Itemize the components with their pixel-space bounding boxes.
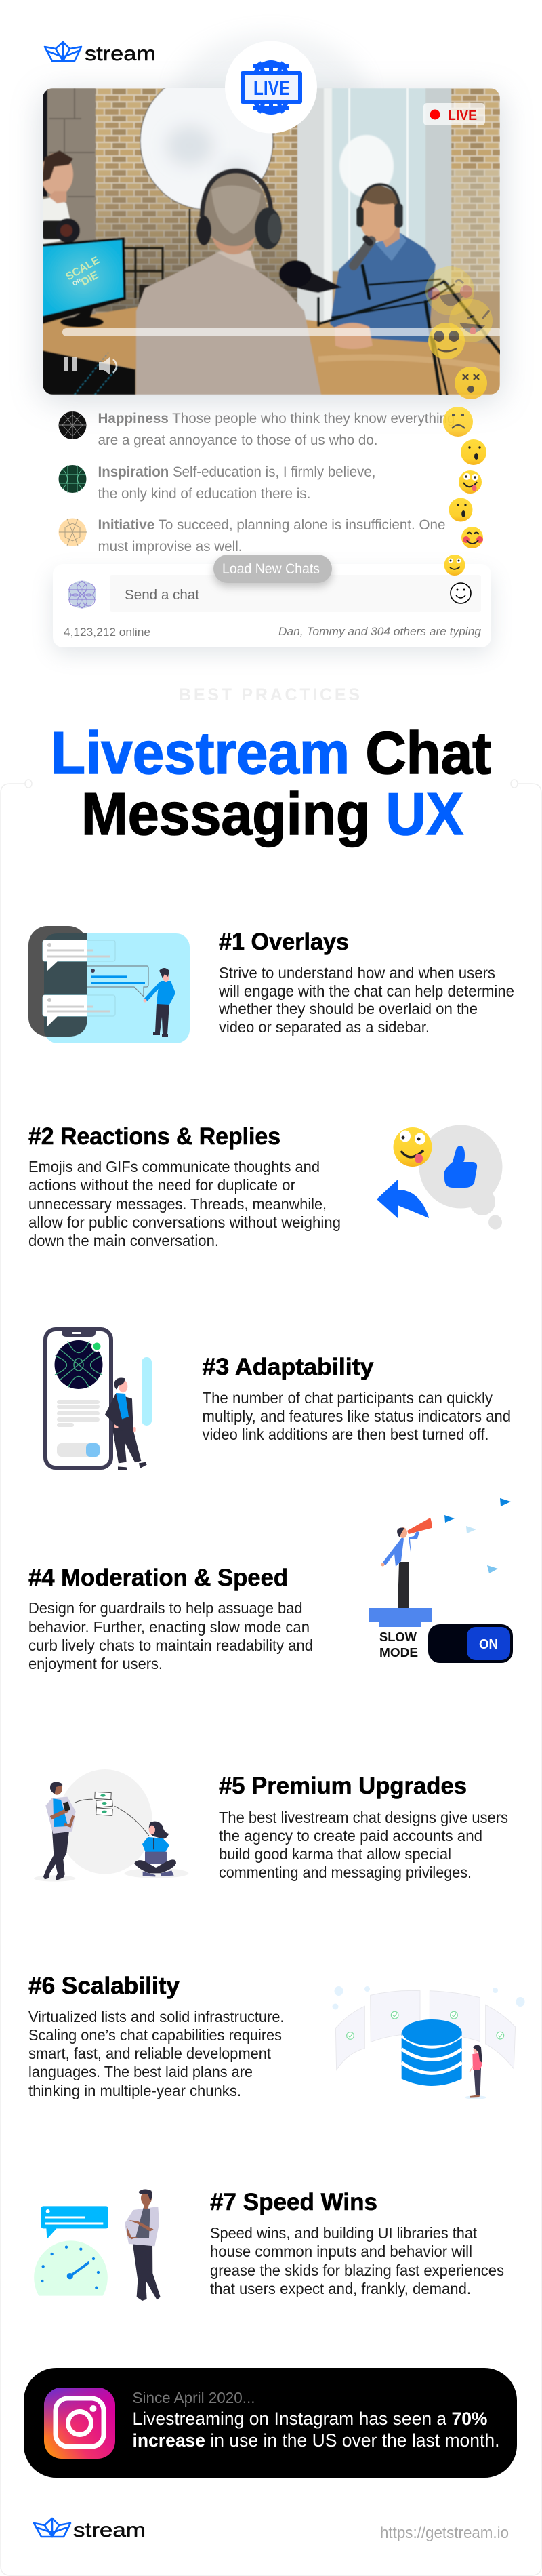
section 4: moderation and speed: curb lively chats to maintain readability and xyxy=(28,1636,313,1654)
pause icon xyxy=(64,357,77,371)
progress bar xyxy=(62,328,503,336)
emoji: knocked out xyxy=(455,367,487,399)
load new chats button xyxy=(213,555,332,587)
background glow behind video xyxy=(43,34,500,400)
section 5: premium upgrades: The best livestream chat designs give users xyxy=(219,1809,508,1826)
section 7: speed wins: grease the skids for blazing fast experiences xyxy=(210,2261,504,2279)
chat message: Initiative xyxy=(58,517,446,555)
logo: stream: stream xyxy=(85,43,156,65)
illustration: payments xyxy=(34,1769,188,1882)
boom arms xyxy=(318,239,500,395)
section 6: scalability: Scaling one’s chat capabilities requires xyxy=(28,2026,282,2044)
live badge: LIVE xyxy=(448,108,477,123)
section 2: reactions and replies: Emojis and GIFs communicate thoughts and xyxy=(28,1158,320,1175)
section 3: adaptability xyxy=(45,1329,511,1470)
section 2: reactions and replies xyxy=(28,1123,503,1249)
logo: stream xyxy=(45,42,156,65)
shelf xyxy=(125,248,164,298)
profile art xyxy=(54,1340,103,1389)
softbox xyxy=(140,73,273,209)
woman with laptop xyxy=(149,1822,169,1838)
icon: instagram xyxy=(44,2388,115,2459)
section 3: adaptability: #3 Adaptability xyxy=(202,1354,374,1380)
illustration: database xyxy=(332,1986,524,2099)
monitor xyxy=(43,237,126,324)
section 6: scalability: languages. The best laid plans are xyxy=(28,2063,253,2080)
screen caption: DIE xyxy=(79,269,101,288)
live badge xyxy=(423,103,485,125)
illustration: overlay chat xyxy=(28,926,190,1043)
chat message: Inspiration: Inspiration Self-education is, I firmly believe, xyxy=(98,464,375,480)
emoji: smile xyxy=(444,555,465,576)
emoji: sunglasses xyxy=(428,323,465,359)
callout: instagram stat: Since April 2020... xyxy=(133,2389,255,2407)
emoji: blushing xyxy=(461,527,483,548)
man with phone xyxy=(43,1827,70,1880)
section 6: scalability: Virtualized lists and solid infrastructure. xyxy=(28,2008,285,2026)
floating emojis xyxy=(425,266,493,576)
emoji: grin xyxy=(449,299,493,342)
chat message: Happiness xyxy=(58,411,455,448)
section 7: speed wins: house common inputs and behavior will xyxy=(210,2242,472,2260)
screen caption: OR xyxy=(71,277,83,287)
illustration: speed gauge xyxy=(34,2190,161,2301)
slow mode label: SLOW xyxy=(379,1630,417,1644)
emoji: tongue out xyxy=(459,470,482,494)
chat message: Inspiration: the only kind of education there is. xyxy=(98,486,310,502)
section 3: adaptability: The number of chat participants can quickly xyxy=(202,1389,493,1407)
section 4: moderation and speed: behavior. Further, enacting slow mode can xyxy=(28,1618,310,1636)
footer logo: stream: stream xyxy=(73,2519,146,2541)
chat input card: 4,123,212 online xyxy=(64,626,150,639)
section 6: scalability xyxy=(28,1973,524,2099)
section 4: moderation and speed: #4 Moderation & Speed xyxy=(28,1565,288,1591)
chat input card xyxy=(53,564,491,653)
callout: instagram stat: increase in use in the US over the last month. xyxy=(133,2430,500,2451)
emoji: tongue xyxy=(393,1127,432,1167)
section 1: overlays: whether they should be overlaid on the xyxy=(218,1000,478,1018)
screen caption: SCALE xyxy=(64,254,102,283)
section eyebrow: BEST PRACTICES xyxy=(179,685,360,704)
section 5: premium upgrades: #5 Premium Upgrades xyxy=(219,1773,467,1799)
section 5: premium upgrades xyxy=(34,1769,508,1882)
chat message: Initiative: must improvise as well. xyxy=(98,539,243,555)
right man xyxy=(330,231,436,342)
chat message: Initiative: Initiative To succeed, planning alone is insufficient. One xyxy=(98,517,446,533)
section 2: reactions and replies: unnecessary messages. Threads, meanwhile, xyxy=(28,1195,327,1213)
toggle xyxy=(428,1624,513,1663)
callout: instagram stat: Livestreaming on Instagram has seen a 70% xyxy=(133,2409,487,2429)
section 1: overlays: video or separated as a sidebar. xyxy=(219,1018,430,1036)
video player xyxy=(41,73,503,395)
chat input card: Send a chat xyxy=(125,588,199,603)
section 2: reactions and replies: actions without the need for duplicate or xyxy=(28,1176,295,1194)
section 5: premium upgrades: the agency to create paid accounts and xyxy=(219,1827,482,1845)
footer logo: stream xyxy=(34,2518,146,2541)
section 6: scalability: thinking in multiple-year chunks. xyxy=(28,2082,241,2099)
person xyxy=(105,1378,147,1470)
emoji: sad xyxy=(443,407,473,437)
live icon circle xyxy=(225,41,317,133)
toggle: ON xyxy=(479,1637,498,1652)
section 6: scalability: smart, fast, and reliable development xyxy=(28,2045,272,2062)
user avatar xyxy=(68,580,96,609)
illustration: reactions xyxy=(377,1125,503,1230)
section 7: speed wins: that users expect and, frankly, demand. xyxy=(210,2280,471,2297)
emoji: laughing xyxy=(425,266,474,315)
callout: instagram stat xyxy=(24,2368,517,2478)
load new chats button: Load New Chats xyxy=(222,561,320,577)
chat message: Happiness: are a great annoyance to those of us who do. xyxy=(98,432,378,448)
woman xyxy=(465,2045,486,2099)
slow mode label xyxy=(379,1630,418,1659)
title: Livestream Chat xyxy=(51,719,491,786)
section 7: speed wins xyxy=(34,2189,504,2301)
emoji: surprised xyxy=(461,439,486,465)
illustration: megaphone on pedestal xyxy=(369,1498,513,1663)
title: Messaging UX xyxy=(81,780,463,847)
smiley button xyxy=(451,583,471,603)
live icon circle: LIVE xyxy=(253,77,290,100)
emoji: surprised small xyxy=(449,498,473,522)
section 5: premium upgrades: build good karma that allow special xyxy=(219,1845,451,1863)
banknotes xyxy=(95,1792,112,1815)
section 3: adaptability: multiply, and features like status indicators and xyxy=(202,1407,511,1425)
section 1: overlays: will engage with the chat can help determine xyxy=(218,982,514,1000)
illustration: phone and person xyxy=(45,1329,152,1470)
table xyxy=(43,307,138,369)
chat message: Happiness: Happiness Those people who think they know everything xyxy=(98,411,455,426)
content panel outline xyxy=(1,780,541,2575)
section 1: overlays xyxy=(28,926,514,1043)
title xyxy=(51,719,491,847)
section 1: overlays: #1 Overlays xyxy=(219,929,349,955)
section 4: moderation and speed: Design for guardrails to help assuage bad xyxy=(28,1599,302,1617)
section 6: scalability: #6 Scalability xyxy=(28,1973,180,1999)
volume icon xyxy=(99,357,117,375)
section 5: premium upgrades: commenting and messaging privileges. xyxy=(219,1864,472,1881)
person pointing xyxy=(144,968,175,1037)
section 4: moderation and speed: enjoyment for users. xyxy=(28,1655,163,1672)
section 4: moderation and speed xyxy=(28,1498,513,1672)
photo: podcast studio xyxy=(41,73,500,395)
chat message: Inspiration xyxy=(58,464,375,502)
footer url: https://getstream.io xyxy=(380,2524,509,2542)
section 2: reactions and replies: allow for public conversations without weighing xyxy=(28,1213,341,1231)
section 7: speed wins: #7 Speed Wins xyxy=(210,2189,377,2215)
section 1: overlays: Strive to understand how and when users xyxy=(219,964,495,982)
person xyxy=(132,2239,161,2301)
chat input card: Dan, Tommy and 304 others are typing xyxy=(278,625,482,638)
section 2: reactions and replies: #2 Reactions & Replies xyxy=(28,1123,280,1150)
slow mode label: MODE xyxy=(379,1646,418,1659)
left man xyxy=(43,197,70,245)
section 2: reactions and replies: down the main conversation. xyxy=(28,1232,219,1249)
back man xyxy=(136,250,321,395)
section 3: adaptability: video link additions are then best turned off. xyxy=(202,1426,489,1443)
icon: thumbs up xyxy=(444,1146,477,1188)
icon: reply arrow xyxy=(377,1180,429,1218)
section 7: speed wins: Speed wins, and building UI libraries that xyxy=(210,2224,478,2242)
